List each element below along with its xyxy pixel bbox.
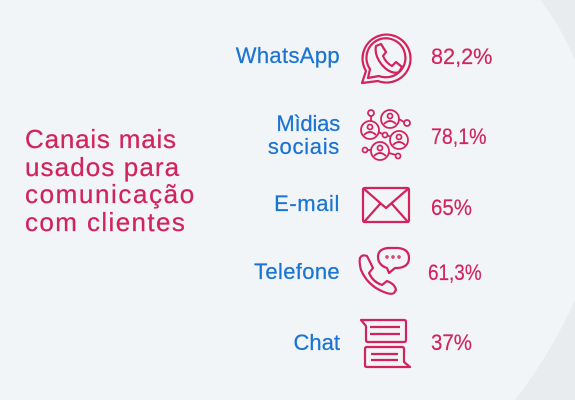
value: Telefone: 61,3% <box>428 260 482 285</box>
label: Mìdias sociais <box>268 111 340 159</box>
title: comunicação <box>25 179 196 209</box>
value: Mìdias sociais: 78,1% <box>431 124 487 149</box>
title: Canais mais <box>25 124 177 154</box>
value: Chat: 37% <box>431 330 472 355</box>
title: com clientes <box>25 207 186 237</box>
title <box>25 124 196 237</box>
label: E-mail: E-mail <box>274 191 340 216</box>
title: usados para <box>25 152 180 182</box>
label: WhatsApp: WhatsApp <box>236 43 340 68</box>
value: E-mail: 65% <box>431 195 472 220</box>
label: Telefone: Telefone <box>254 259 340 284</box>
label: Chat: Chat <box>294 330 340 355</box>
label: Mìdias sociais: sociais <box>268 134 340 159</box>
label: Mìdias sociais: Mìdias <box>276 111 340 136</box>
value: WhatsApp: 82,2% <box>431 44 492 69</box>
